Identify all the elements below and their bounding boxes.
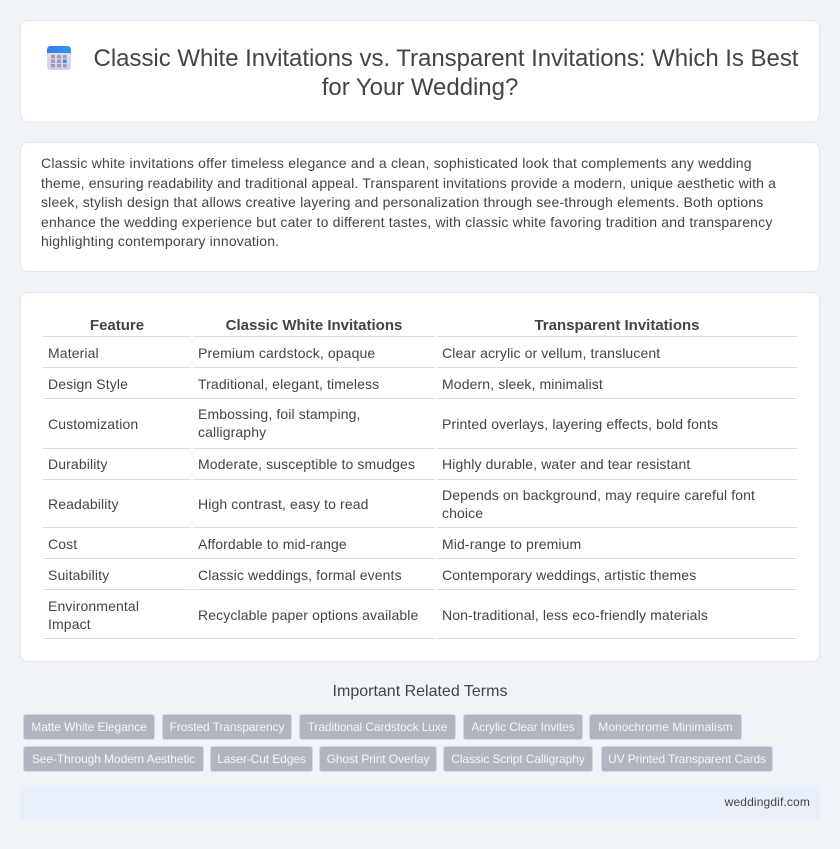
row: durability: Durability bbox=[48, 456, 108, 472]
row: material: Premium cardstock, opaque bbox=[198, 345, 375, 361]
row: customization: Printed overlays, layering effects, bold fonts bbox=[442, 416, 718, 432]
row: durability bbox=[48, 456, 690, 472]
row: environmental impact: Recyclable paper options available bbox=[198, 607, 418, 623]
row: design style: Design Style bbox=[48, 376, 128, 392]
comparison table panel bbox=[20, 292, 820, 662]
comparison table: Embossing, foil stamping, bbox=[198, 406, 361, 422]
row: readability: Readability bbox=[48, 496, 119, 512]
row: customization: Customization bbox=[48, 416, 138, 432]
related terms tags: See-Through Modern Aesthetic bbox=[32, 752, 195, 766]
row: durability: Moderate, susceptible to smudges bbox=[198, 456, 415, 472]
related terms tags: UV Printed Transparent Cards bbox=[608, 752, 766, 766]
row: suitability: Suitability bbox=[48, 567, 109, 583]
intro text: sleek, stylish design that allows creative layering and personalization through see-through elements. Both options bbox=[41, 194, 763, 210]
row: environmental impact: Environmental bbox=[48, 598, 139, 614]
footer bar bbox=[20, 785, 820, 819]
row: suitability bbox=[48, 567, 696, 583]
related terms tags: Traditional Cardstock Luxe bbox=[308, 720, 447, 734]
row: design style: Traditional, elegant, timeless bbox=[198, 376, 379, 392]
header: feature: Feature bbox=[90, 317, 144, 334]
intro text bbox=[41, 155, 776, 249]
row: customization bbox=[48, 406, 718, 440]
intro text: enhance the wedding experience but cater to different tastes, with classic white favoring tradition and transparency bbox=[41, 214, 773, 230]
intro text: theme, ensuring readability and traditional appeal. Transparent invitations provide a modern, unique aesthetic with a bbox=[41, 174, 776, 190]
row: readability: choice bbox=[442, 505, 483, 521]
related terms tags: Frosted Transparency bbox=[170, 720, 284, 734]
row: cost bbox=[48, 536, 581, 552]
row: material: Clear acrylic or vellum, translucent bbox=[442, 345, 660, 361]
row: cost: Affordable to mid-range bbox=[198, 536, 347, 552]
row: readability: Depends on background, may require careful font bbox=[442, 487, 755, 503]
row: cost: Cost bbox=[48, 536, 77, 552]
row: cost: Mid-range to premium bbox=[442, 536, 581, 552]
related terms tags: Acrylic Clear Invites bbox=[471, 720, 575, 734]
footer source: weddingdif.com bbox=[725, 795, 810, 809]
row: environmental impact: Non-traditional, less eco-friendly materials bbox=[442, 607, 708, 623]
row: material: Material bbox=[48, 345, 99, 361]
title bbox=[94, 45, 798, 101]
intro text: highlighting contemporary innovation. bbox=[41, 233, 279, 249]
row: material bbox=[48, 345, 660, 361]
row: environmental impact: Impact bbox=[48, 616, 91, 632]
title: Classic White Invitations vs. Transparent Invitations: Which Is Best bbox=[94, 45, 798, 72]
row: design style bbox=[48, 376, 603, 392]
row: design style: Modern, sleek, minimalist bbox=[442, 376, 603, 392]
row: customization: calligraphy bbox=[198, 424, 266, 440]
row: durability: Highly durable, water and tear resistant bbox=[442, 456, 690, 472]
intro text: Classic white invitations offer timeless elegance and a clean, sophisticated look that complements any wedding bbox=[41, 155, 752, 171]
related terms tags bbox=[23, 714, 773, 772]
row: environmental impact bbox=[48, 598, 708, 632]
related terms tags: Monochrome Minimalism bbox=[598, 720, 733, 734]
row: readability: High contrast, easy to read bbox=[198, 496, 369, 512]
comparison table bbox=[43, 317, 797, 639]
related terms tags: Laser-Cut Edges bbox=[217, 752, 306, 766]
related terms heading: Important Related Terms bbox=[333, 683, 507, 700]
related terms tags: Matte White Elegance bbox=[31, 720, 147, 734]
related terms tags: Ghost Print Overlay bbox=[327, 752, 429, 766]
row: readability bbox=[48, 487, 755, 521]
icon: calendar bbox=[47, 46, 71, 70]
intro panel bbox=[20, 142, 820, 272]
row: suitability: Contemporary weddings, artistic themes bbox=[442, 567, 696, 583]
title: for Your Wedding? bbox=[322, 74, 518, 101]
row: suitability: Classic weddings, formal events bbox=[198, 567, 402, 583]
header: transparent: Transparent Invitations bbox=[534, 317, 700, 334]
header: classic white: Classic White Invitations bbox=[226, 317, 402, 334]
header panel bbox=[20, 20, 820, 123]
related terms tags: Classic Script Calligraphy bbox=[451, 752, 585, 766]
